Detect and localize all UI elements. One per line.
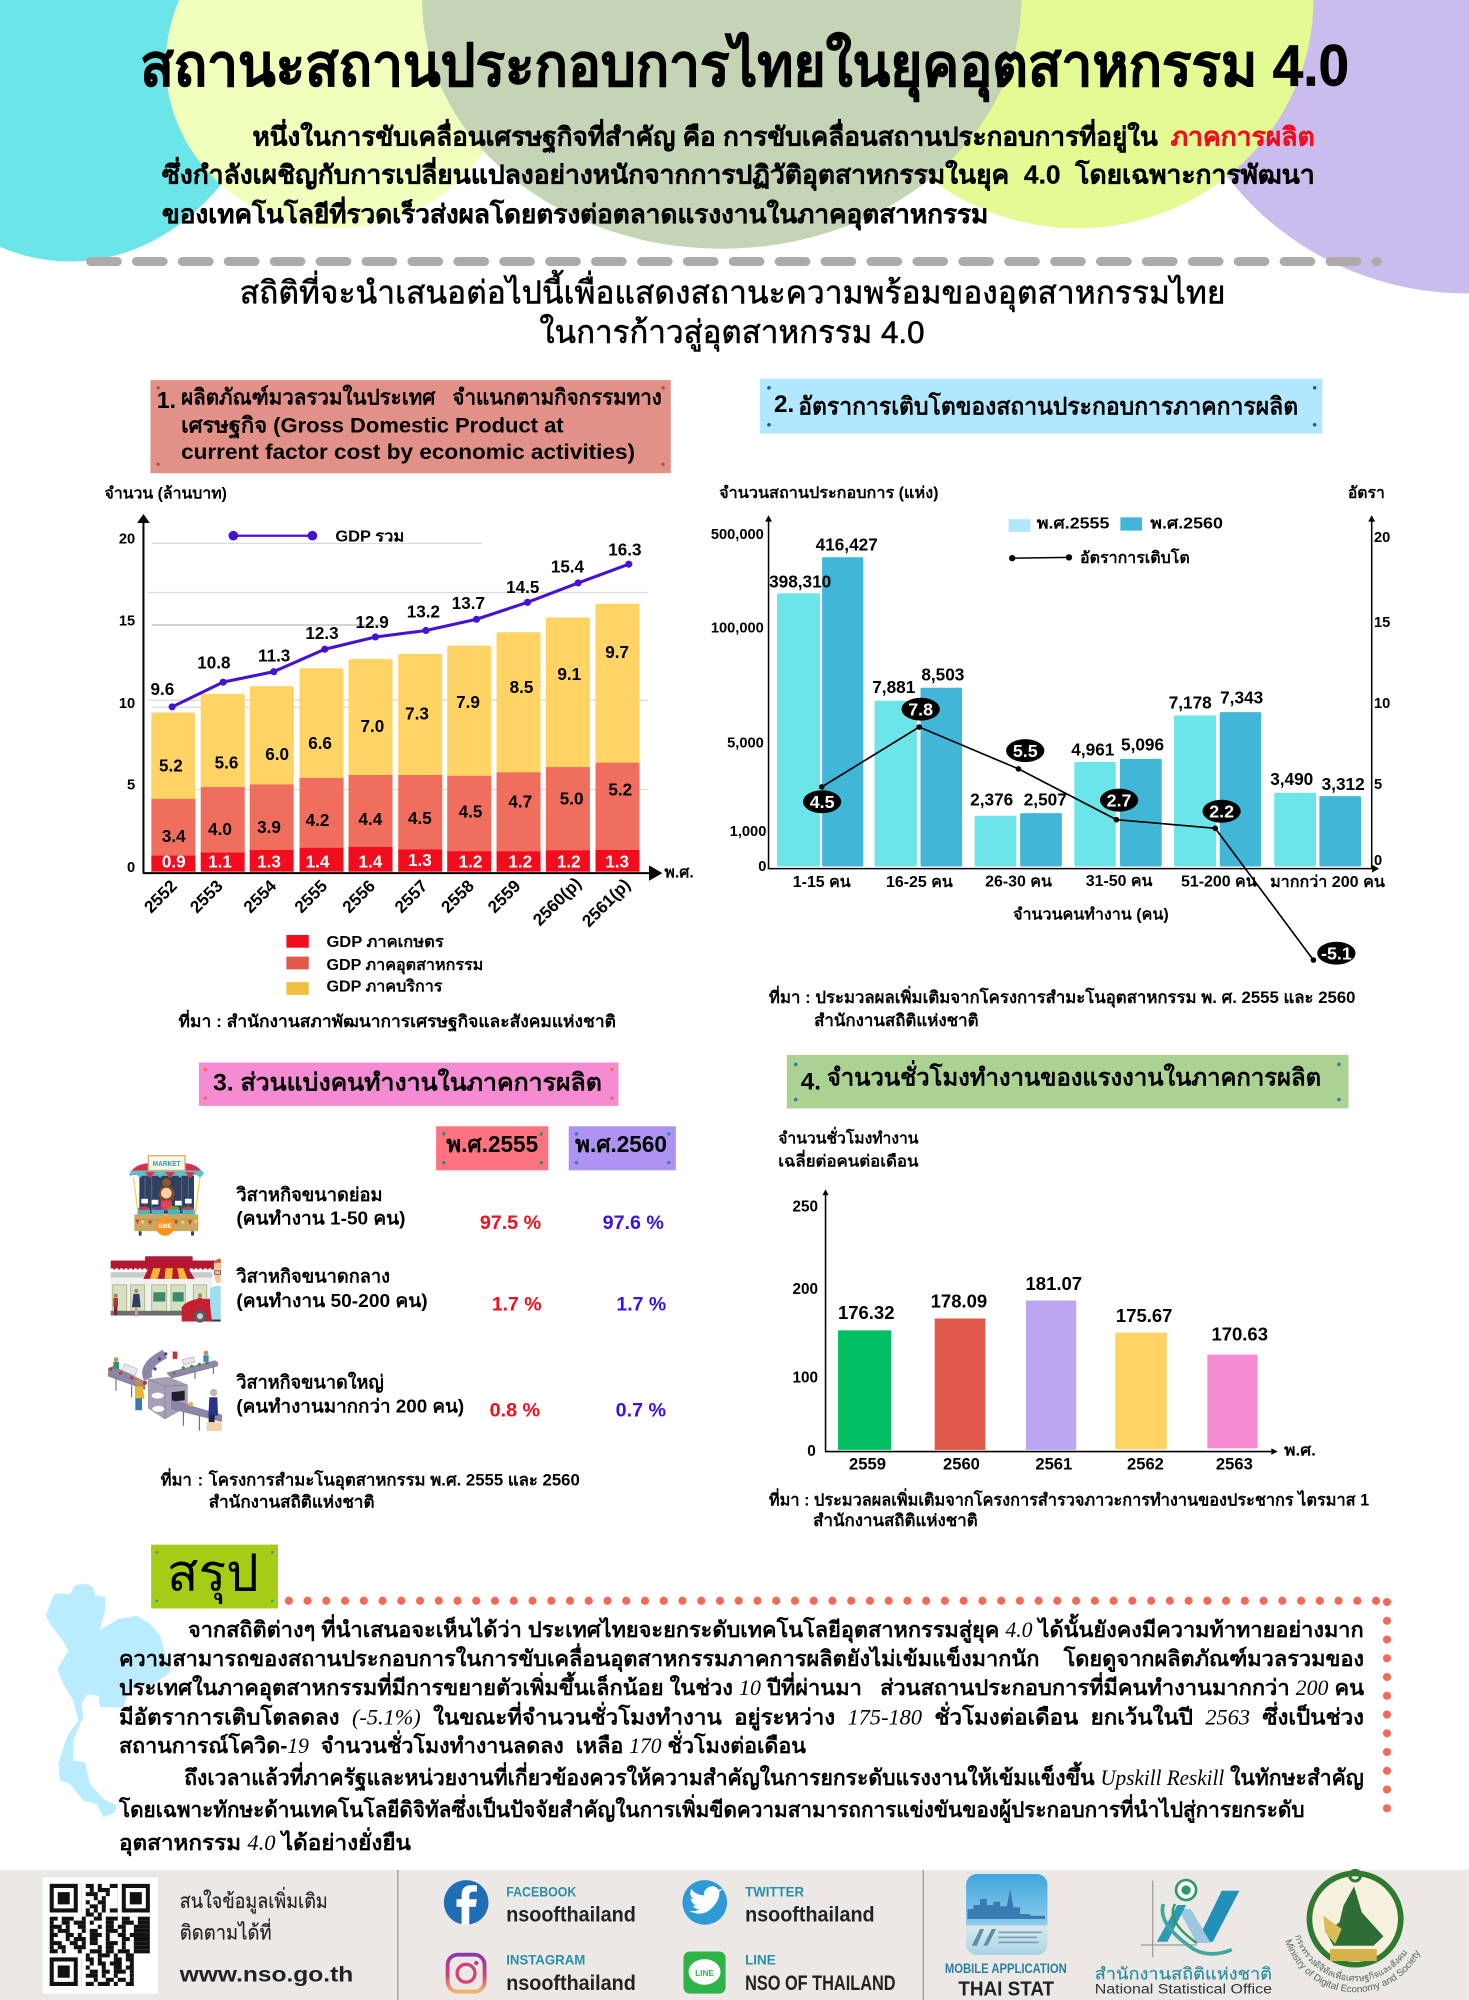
axes	[765, 515, 1379, 872]
source 1: ที่มา : สำนักงานสภาพัฒนาการเศรษฐกิจและสังคมแห่งชาติ	[179, 1009, 616, 1032]
panel: chart 4 working hours	[769, 1055, 1369, 1530]
conclusion text: ประเทศในภาคอุตสาหกรรมที่มีการขยายตัวเพิ่มขึ้นเล็กน้อย ในช่วง 10 ปีที่ผ่านมา ส่วนสถานประกอบการที่มีคนทำงานมากกว่า 200 คน	[119, 1671, 1364, 1702]
y ticks: 0	[127, 860, 135, 876]
total GDP values: 16.3	[608, 540, 641, 559]
icon: facebook	[444, 1880, 489, 1925]
legend	[1009, 516, 1223, 567]
app logo: MOBILE APPLICATION	[945, 1961, 1067, 1976]
bar values: 181.07	[1026, 1273, 1082, 1294]
year header 2560	[569, 1126, 676, 1170]
legend: sectors: GDP ภาคบริการ	[326, 978, 443, 996]
ministry seal: Ministry of Digital Economy and Society	[1285, 1939, 1420, 1992]
facebook text	[506, 1884, 636, 1927]
bar values: 176.32	[838, 1302, 894, 1323]
x labels: 2562	[1127, 1454, 1164, 1473]
x labels: 2559	[484, 876, 524, 917]
right ticks	[1374, 530, 1390, 869]
y ticks: 5	[127, 778, 135, 794]
x labels: 2559	[849, 1454, 886, 1473]
icon: factory conveyor	[108, 1351, 222, 1431]
y ticks	[793, 1199, 818, 1460]
y ticks	[119, 531, 135, 876]
bar values: 170.63	[1211, 1324, 1268, 1345]
axis titles: จำนวนสถานประกอบการ (แห่ง)	[719, 484, 939, 502]
industry values	[162, 781, 632, 846]
industry values: 5.2	[608, 781, 632, 800]
x labels: 2560	[943, 1454, 980, 1473]
panel: chart 1 GDP	[105, 380, 694, 1032]
legend: sectors	[286, 934, 483, 996]
legend: พ.ศ.2560	[1150, 516, 1223, 533]
axes	[137, 514, 662, 881]
bar values: 5,096	[1121, 735, 1164, 755]
y axis title: เฉลี่ยต่อคนต่อเดือน	[778, 1149, 919, 1170]
right ticks: 15	[1374, 615, 1390, 631]
total GDP values: 10.8	[197, 653, 230, 672]
axes	[822, 1189, 1278, 1455]
heading 1	[150, 380, 671, 473]
source 3: โครงการสำมะโนอุตสาหกรรม พ.ศ. 2555 และ 2560	[208, 1469, 580, 1490]
service values: 9.7	[605, 643, 629, 662]
instagram text	[506, 1951, 636, 1995]
left ticks: 1,000	[730, 824, 766, 840]
heading 1: เศรษฐกิจ (Gross Domestic Product at	[181, 412, 564, 439]
total GDP values: 12.3	[305, 624, 339, 643]
x labels: 2554	[240, 876, 281, 917]
intro paragraph: ซึ่งกำลังเผชิญกับการเปลี่ยนแปลงอย่างหนักจากการปฏิวัติอุตสาหกรรมในยุค 4.0 โดยเฉพาะการพัฒนา	[162, 157, 1315, 192]
source 4	[769, 1488, 1369, 1530]
conclusion text: ความสามารถของสถานประกอบการในการขับเคลื่อนอุตสาหกรรมภาคการผลิตยังไม่เข้มแข็งมากนัก โดยดูจากผลิตภัณฑ์มวลรวมของ	[119, 1643, 1364, 1673]
y axis title	[778, 1126, 919, 1170]
heading 3	[199, 1062, 618, 1106]
x labels: 2560(p)	[529, 874, 585, 930]
service values: 7.0	[360, 717, 384, 736]
y axis title: จำนวนชั่วโมงทำงาน	[778, 1126, 919, 1147]
NSO logo: สำนักงานสถิติแห่งชาติ	[1095, 1965, 1272, 1984]
conclusion text: มีอัตราการเติบโตลดลง (-5.1%) ในขณะที่จำนวนชั่วโมงทำงาน อยู่ระหว่าง 175-180 ชั่วโมงต่อเดือน ยกเว้นในปี 2563 ซึ่งเป็นช่วง	[119, 1701, 1364, 1731]
agriculture values: 1.2	[557, 852, 581, 871]
bar values	[769, 534, 1365, 809]
legend: อัตราการเติบโต	[1080, 547, 1190, 567]
agriculture values: 1.3	[408, 851, 432, 870]
industry values: 4.0	[208, 820, 232, 839]
bar values: 7,881	[872, 677, 916, 697]
bar values: 7,178	[1169, 693, 1212, 713]
growth badges: 4.5	[810, 792, 835, 812]
industry values: 4.4	[359, 810, 383, 829]
x labels: 2553	[186, 876, 227, 917]
bar values: 3,312	[1322, 774, 1365, 794]
industry values: 4.5	[408, 809, 432, 828]
x labels: 2555	[291, 876, 332, 917]
conclusion text: สถานการณ์โควิด-19 จำนวนชั่วโมงทำงานลดลง เหลือ 170 ชั่วโมงต่อเดือน	[119, 1730, 806, 1758]
service values: 6.6	[308, 734, 332, 753]
total GDP values: 15.4	[551, 558, 585, 577]
agriculture values: 1.4	[306, 852, 330, 871]
bar values: 178.09	[931, 1290, 987, 1311]
y ticks: 20	[119, 531, 135, 547]
2555 values	[480, 1213, 542, 1421]
axis title: จำนวน (ล้านบาท)	[105, 485, 227, 503]
heading 4	[787, 1055, 1348, 1108]
row labels	[236, 1184, 464, 1417]
2555 values: 1.7 %	[492, 1295, 542, 1316]
facebook text: FACEBOOK	[506, 1884, 576, 1900]
agriculture values: 1.2	[459, 852, 482, 871]
icon: shop	[111, 1256, 221, 1323]
x labels: 2561	[1035, 1454, 1072, 1473]
2560 values: 0.7 %	[616, 1400, 666, 1421]
agriculture values: 1.1	[208, 852, 232, 871]
conclusion text: โดยเฉพาะทักษะด้านเทคโนโลยีดิจิทัลซึ่งเป็นปัจจัยสำคัญในการเพิ่มขีดความสามารถการแข่งขันของผู้ประกอบการที่นำไปสู่การยกระดับ	[118, 1794, 1305, 1824]
intro paragraph: ภาคการผลิต	[1171, 123, 1315, 151]
total GDP values: 11.3	[258, 646, 290, 665]
agriculture values: 1.3	[605, 852, 629, 871]
industry values: 3.4	[162, 827, 186, 846]
2560 values	[603, 1213, 666, 1421]
footer	[0, 1868, 1469, 2000]
x axis title: จำนวนคนทำงาน (คน)	[1013, 906, 1169, 924]
icon: line: LINE	[695, 1969, 714, 1978]
row labels: วิสาหกิจขนาดใหญ่	[236, 1370, 384, 1393]
right ticks: 10	[1374, 696, 1390, 712]
agriculture values: 1.4	[359, 852, 383, 871]
total GDP values: 9.6	[150, 680, 174, 699]
row labels: วิสาหกิจขนาดย่อม	[236, 1184, 383, 1205]
growth badges: 5.5	[1013, 741, 1038, 761]
2560 values: 97.6 %	[603, 1213, 664, 1234]
growth badges: 7.8	[908, 700, 933, 720]
year header 2555: พ.ศ.2555	[446, 1131, 538, 1157]
facebook text: nsoofthailand	[506, 1902, 636, 1927]
panel: conclusion	[46, 1545, 1387, 1857]
y ticks: 10	[119, 696, 135, 712]
heading 1: current factor cost by economic activities)	[181, 439, 635, 464]
icon: QR code	[43, 1878, 158, 1994]
legend: sectors: GDP ภาคเกษตร	[326, 934, 444, 951]
panel: chart 2 establishments	[711, 379, 1390, 1030]
icon: market stall	[129, 1156, 204, 1236]
growth badges: -5.1	[1321, 944, 1352, 964]
bar values: 3,490	[1270, 769, 1313, 789]
left ticks: 500,000	[711, 527, 764, 543]
category labels	[793, 873, 1385, 891]
icon: Thailand map	[46, 1583, 171, 1817]
conclusion heading: สรุป	[167, 1545, 259, 1605]
bar values: 175.67	[1116, 1305, 1172, 1326]
y ticks: 200	[793, 1281, 818, 1298]
industry values: 4.5	[459, 803, 483, 822]
source 4: สำนักงานสถิติแห่งชาติ	[813, 1511, 978, 1530]
industry values: 4.7	[508, 792, 532, 811]
growth line	[819, 724, 1316, 963]
heading 2	[760, 379, 1322, 434]
x labels: 2561(p)	[578, 875, 634, 931]
icon: instagram	[448, 1955, 485, 1992]
contact text: ติดตามได้ที่	[180, 1918, 272, 1944]
source 2: สำนักงานสถิติแห่งชาติ	[814, 1011, 979, 1030]
category labels: 51-200 คน	[1181, 873, 1257, 890]
icon: market stall: SME	[158, 1223, 172, 1230]
service values: 5.2	[159, 757, 183, 776]
service values	[159, 643, 629, 776]
legend: พ.ศ.2555	[1037, 516, 1110, 533]
heading 1: 1.	[157, 387, 176, 413]
icon: twitter	[682, 1880, 727, 1925]
left ticks: 100,000	[711, 621, 764, 637]
contact text: www.nso.go.th	[179, 1962, 353, 1987]
intro paragraph: หนึ่งในการขับเคลื่อนเศรษฐกิจที่สำคัญ คือ การขับเคลื่อนสถานประกอบการที่อยู่ใน	[252, 118, 1158, 154]
ministry seal: กระทรวงดิจิทัลเพื่อเศรษฐกิจและสังคม	[1295, 1935, 1408, 1983]
left ticks: 5,000	[727, 735, 764, 751]
source 3: ที่มา	[161, 1467, 192, 1489]
x labels: 2563	[1216, 1454, 1253, 1473]
conclusion text: อุตสาหกรรม 4.0 ได้อย่างยั่งยืน	[119, 1827, 411, 1857]
axis titles	[719, 484, 1385, 502]
2555 values: 0.8 %	[490, 1400, 540, 1421]
service values: 9.1	[557, 665, 582, 684]
agriculture values	[162, 851, 629, 871]
industry values: 4.2	[306, 811, 329, 830]
app logo: THAI STAT	[958, 1979, 1055, 2000]
x labels: 2552	[140, 876, 181, 917]
category labels: 1-15 คน	[793, 874, 851, 891]
x labels: 2557	[391, 876, 431, 917]
source 3: :	[198, 1470, 203, 1489]
x labels	[849, 1454, 1253, 1473]
service values: 6.0	[265, 745, 289, 764]
category labels: 16-25 คน	[886, 874, 953, 891]
bar values: 4,961	[1071, 740, 1115, 760]
category labels: มากกว่า 200 คน	[1270, 874, 1385, 891]
contact text	[179, 1887, 353, 1987]
right ticks: 0	[1374, 853, 1382, 869]
conclusion text	[118, 1613, 1364, 1857]
bars	[838, 1301, 1258, 1450]
bar values	[838, 1273, 1268, 1345]
legend: sectors: GDP ภาคอุตสาหกรรม	[326, 957, 483, 975]
industry values: 3.9	[257, 818, 281, 837]
growth badges: 2.2	[1209, 802, 1234, 822]
x labels	[140, 874, 634, 931]
total GDP values: 14.5	[506, 578, 540, 597]
NSO logo	[1095, 1880, 1272, 1997]
contact text: สนใจข้อมูลเพิ่มเติม	[180, 1887, 328, 1914]
year header 2555	[436, 1126, 548, 1170]
total GDP values	[150, 540, 641, 699]
row labels: วิสาหกิจขนาดกลาง	[236, 1266, 390, 1287]
subtitle: สถิติที่จะนำเสนอต่อไปนี้เพื่อแสดงสถานะความพร้อมของอุตสาหกรรมไทย	[240, 270, 1225, 313]
app logo	[945, 1874, 1067, 2000]
subtitle: ในการก้าวสู่อุตสาหกรรม 4.0	[539, 314, 925, 352]
category labels: 26-30 คน	[985, 873, 1052, 890]
source 3	[161, 1467, 580, 1512]
service values: 8.5	[510, 678, 534, 697]
2555 values: 97.5 %	[480, 1213, 541, 1234]
bar values: 2,507	[1024, 789, 1067, 809]
panel: share of workers	[108, 1062, 676, 1512]
heading 1: ผลิตภัณฑ์มวลรวมในประเทศ จำแนกตามกิจกรรมทาง	[181, 383, 662, 409]
category labels: 31-50 คน	[1086, 873, 1153, 890]
row labels: (คนทำงาน 1-50 คน)	[236, 1207, 406, 1228]
y ticks: 100	[793, 1370, 818, 1387]
icon: line	[683, 1952, 726, 1994]
heading 4: จำนวนชั่วโมงทำงานของแรงงานในภาคการผลิต	[827, 1059, 1321, 1091]
heading 4: 4.	[801, 1068, 821, 1095]
instagram text: INSTAGRAM	[506, 1951, 585, 1967]
heading 2: อัตราการเติบโตของสถานประกอบการภาคการผลิต	[798, 392, 1298, 421]
service values: 7.9	[456, 693, 480, 712]
right ticks: 5	[1374, 777, 1382, 793]
ministry seal	[1285, 1868, 1420, 1992]
service values: 5.6	[215, 753, 238, 772]
service values: 7.3	[405, 704, 429, 723]
legend: total line: GDP รวม	[335, 528, 404, 545]
instagram text: nsoofthailand	[506, 1970, 636, 1995]
axis titles: อัตรา	[1348, 484, 1385, 502]
right ticks: 20	[1374, 530, 1390, 546]
intro paragraph	[162, 118, 1315, 231]
twitter text: nsoofthailand	[745, 1902, 875, 1927]
icon: market stall: MARKET	[153, 1161, 181, 1168]
bar values: 416,427	[816, 534, 878, 554]
line text: NSO OF THAILAND	[745, 1970, 896, 1995]
row labels: (คนทำงาน 50-200 คน)	[236, 1290, 428, 1311]
line text: LINE	[745, 1951, 776, 1967]
conclusion heading	[151, 1545, 278, 1608]
total GDP values: 13.2	[407, 602, 440, 621]
title: สถานะสถานประกอบการไทยในยุคอุตสาหกรรม 4.0	[140, 31, 1349, 102]
bar values: 398,310	[769, 571, 831, 591]
twitter text: TWITTER	[745, 1884, 804, 1900]
left ticks	[711, 527, 766, 875]
total GDP values: 12.9	[355, 613, 389, 632]
x axis unit: พ.ศ.	[1284, 1442, 1316, 1459]
x labels: 2556	[339, 876, 379, 917]
intro paragraph: ของเทคโนโลยีที่รวดเร็วส่งผลโดยตรงต่อตลาดแรงงานในภาคอุตสาหกรรม	[162, 196, 988, 231]
total GDP line	[169, 561, 632, 710]
subtitle	[240, 270, 1225, 352]
source 3: สำนักงานสถิติแห่งชาติ	[209, 1493, 375, 1512]
bar values: 8,503	[921, 664, 964, 684]
bar values: 7,343	[1220, 687, 1263, 707]
conclusion text: จากสถิติต่างๆ ที่นำเสนอจะเห็นได้ว่า ประเทศไทยจะยกระดับเทคโนโลยีอุตสาหกรรมสู่ยุค 4.0 ได้นั้นยังคงมีความท้าทายอย่างมาก	[188, 1613, 1364, 1644]
stacked bars	[151, 604, 639, 872]
agriculture values: 1.3	[257, 852, 281, 871]
row labels: (คนทำงานมากกว่า 200 คน)	[236, 1396, 464, 1417]
agriculture values: 1.2	[508, 852, 532, 871]
y ticks: 250	[793, 1199, 818, 1216]
line text	[745, 1951, 896, 1995]
agriculture values: 0.9	[162, 852, 186, 871]
source 2	[769, 985, 1356, 1030]
y ticks: 15	[119, 614, 135, 630]
legend: total line	[229, 528, 404, 545]
total GDP values: 13.7	[452, 594, 485, 613]
x axis unit: พ.ศ.	[664, 865, 694, 882]
2560 values: 1.7 %	[616, 1295, 666, 1316]
background circles	[0, 0, 1469, 293]
source 4: ที่มา : ประมวลผลเพิ่มเติมจากโครงการสำรวจภาวะการทำงานของประชากร ไตรมาส 1	[769, 1488, 1369, 1510]
twitter text	[745, 1884, 875, 1927]
industry values: 5.0	[560, 789, 584, 808]
heading 3: 3. ส่วนแบ่งคนทำงานในภาคการผลิต	[213, 1068, 602, 1097]
left ticks: 0	[758, 859, 766, 875]
x labels: 2558	[438, 876, 478, 917]
source 2: ที่มา : ประมวลผลเพิ่มเติมจากโครงการสำมะโนอุตสาหกรรม พ. ศ. 2555 และ 2560	[769, 985, 1356, 1008]
heading 2: 2.	[774, 391, 794, 418]
bar values: 2,376	[970, 789, 1013, 809]
bars	[777, 557, 1361, 866]
NSO logo: National Statistical Office	[1095, 1982, 1272, 1997]
conclusion text: ถึงเวลาแล้วที่ภาครัฐและหน่วยงานที่เกี่ยวข้องควรให้ความสำคัญในการยกระดับแรงงานให้เข้มแข็งขึ้น Upskill Reskill ในทักษะสำคัญ	[184, 1761, 1364, 1792]
year header 2560: พ.ศ.2560	[575, 1131, 667, 1157]
growth badges: 2.7	[1107, 791, 1132, 811]
growth badges	[803, 698, 1356, 965]
y ticks: 0	[807, 1443, 816, 1460]
